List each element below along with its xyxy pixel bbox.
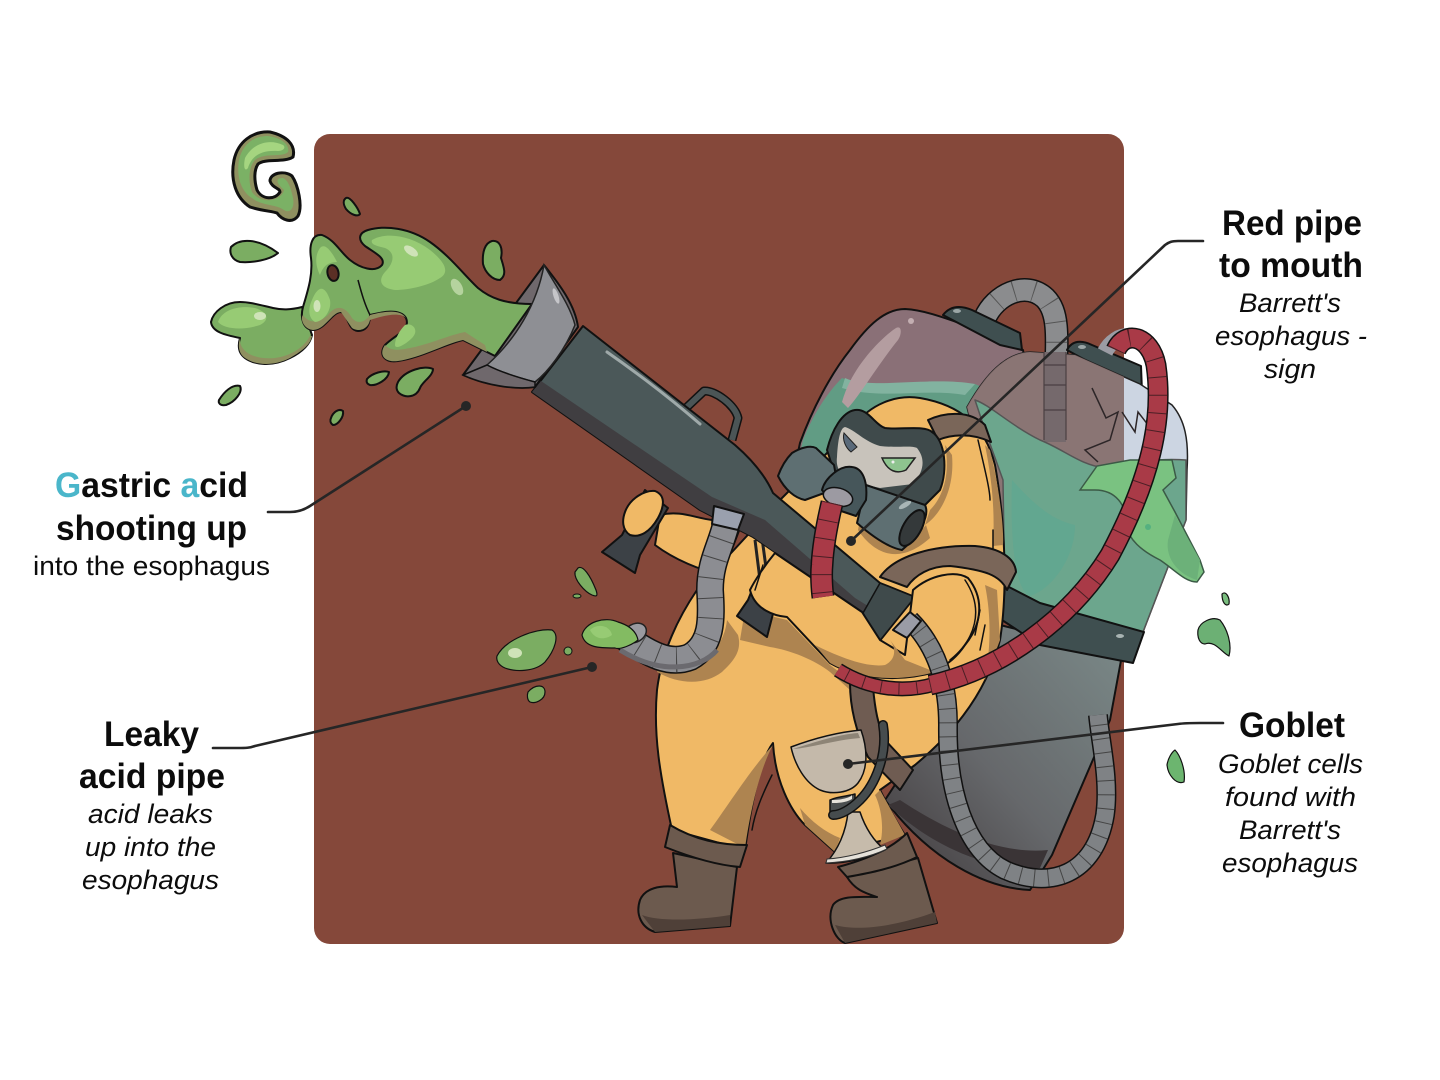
- neck strap: [928, 414, 991, 442]
- holster strap: [833, 725, 884, 815]
- cone outer: [463, 265, 578, 388]
- left filter: [778, 447, 838, 500]
- goblet: [791, 725, 887, 863]
- right filter: [857, 485, 926, 550]
- left boot cuff: [665, 825, 747, 867]
- filter highlights: [898, 499, 912, 511]
- long grey hose: [893, 612, 1106, 878]
- goblet bowl: [791, 730, 866, 793]
- right eye: [882, 458, 915, 472]
- puddle gloss: [508, 648, 522, 658]
- face window: [837, 427, 923, 488]
- shines: [402, 243, 420, 259]
- label: leaky acid pipe: acid leaks: [88, 799, 213, 829]
- upper drip: [575, 567, 597, 596]
- label: gastric acid: [33, 466, 270, 581]
- front grip: [737, 590, 775, 637]
- acid highlight: [1012, 480, 1075, 596]
- left boot: [638, 853, 737, 932]
- belt highlight: [1116, 634, 1124, 638]
- tank caps: [943, 307, 1142, 392]
- hood ring: [827, 410, 944, 505]
- hose seen through glass: [1044, 352, 1066, 442]
- leaky hose: [620, 506, 744, 667]
- lower drip: [527, 686, 545, 703]
- A counter hole: [326, 264, 340, 282]
- right drip leaf: [1167, 750, 1184, 783]
- forearm creases: [755, 565, 980, 660]
- label: red pipe to mouth: [1215, 204, 1367, 384]
- bazooka: [463, 265, 915, 643]
- label: leaky acid pipe: [79, 715, 225, 895]
- left arm: [655, 513, 745, 575]
- panel: brown background: [314, 134, 1124, 944]
- hose mouth: [620, 619, 650, 647]
- shoulder strap: [880, 546, 1016, 590]
- label: goblet: [1218, 706, 1363, 878]
- small tank hose stub: [1105, 336, 1130, 352]
- grip strut: [755, 538, 767, 580]
- gas mask: [778, 410, 944, 550]
- forearm: [750, 553, 979, 678]
- strap by hip: [850, 683, 913, 790]
- barrel sheen: [607, 352, 700, 424]
- suit creases: [752, 440, 993, 830]
- boots: [638, 825, 937, 943]
- callout line: red pipe: [846, 241, 1203, 546]
- back tanks: [790, 290, 1204, 890]
- callout line: leaky pipe: [213, 662, 597, 748]
- acid splash letters: [211, 132, 532, 425]
- callout line: goblet: [843, 723, 1223, 769]
- hose over rear tank: [985, 290, 1057, 420]
- right tank: glass: [967, 352, 1187, 632]
- right drip large: [1198, 619, 1230, 656]
- large puddle: [497, 630, 556, 670]
- label: goblet: Barrett's: [1239, 815, 1341, 845]
- suit body: [656, 397, 1005, 852]
- stream highlight: [372, 236, 445, 290]
- tiny drip: [573, 594, 581, 598]
- label: goblet: esophagus: [1222, 848, 1358, 878]
- acid droplets near nozzle: [219, 198, 504, 425]
- label: red pipe to mouth: Red pipe: [1222, 204, 1362, 243]
- label: goblet: found with: [1225, 782, 1356, 812]
- label: leaky acid pipe: esophagus: [82, 865, 219, 895]
- label: goblet: Goblet: [1239, 706, 1345, 745]
- suit shadows: [657, 445, 1003, 852]
- left hand: [623, 491, 663, 536]
- rear grip: [602, 490, 668, 573]
- left tank: [790, 309, 1040, 560]
- glass crack: [1085, 388, 1152, 462]
- A inner crease: [358, 280, 370, 315]
- label: gastric acid: into the esophagus: [33, 551, 270, 581]
- A and stream shape: [302, 228, 532, 361]
- valve collar: [821, 484, 855, 510]
- long red hose: [838, 338, 1158, 689]
- small round drip: [564, 647, 572, 655]
- pipe spill: [582, 620, 638, 648]
- spill gloss: [590, 626, 612, 638]
- label: red pipe to mouth: sign: [1264, 354, 1316, 384]
- label: gastric acid: Gastric acid: [55, 466, 248, 505]
- right drip small: [1222, 593, 1229, 605]
- overflowing acid: [1080, 460, 1204, 582]
- forearm shadow: [815, 640, 935, 678]
- callout line: gastric acid: [268, 401, 471, 512]
- barrel end flare: [863, 583, 915, 643]
- goblet foot: [826, 812, 885, 863]
- lower tank body: [885, 625, 1122, 890]
- cone inner face: [463, 265, 575, 388]
- cone lower rim: [463, 365, 535, 388]
- acid droplets at leaky pipe: [497, 567, 638, 703]
- cone highlight: [551, 288, 561, 304]
- stream lower shade: [302, 308, 487, 361]
- hose connector: [712, 506, 744, 530]
- label: goblet: Goblet cells: [1218, 749, 1363, 779]
- strap belt on tanks: [1002, 585, 1144, 663]
- letter A with stream: [211, 228, 532, 364]
- front red hose: [822, 503, 832, 597]
- right tank: acid: [975, 400, 1186, 632]
- bazooka handle: [686, 391, 738, 440]
- right tank: glass over panel: [967, 352, 1124, 516]
- right boot sole: [835, 912, 937, 943]
- right boot: [831, 858, 937, 943]
- label: gastric acid: shooting up: [56, 509, 247, 548]
- left eye: [843, 433, 857, 452]
- stream highlight 2: [309, 246, 415, 347]
- left boot sole: [642, 915, 730, 932]
- letter G: [233, 132, 300, 220]
- main hose run: [930, 338, 1158, 685]
- label: leaky acid pipe: acid pipe: [79, 757, 225, 796]
- acid droplets at right side: [1167, 593, 1230, 783]
- left puddle: [211, 302, 312, 364]
- centre valve: [822, 467, 866, 516]
- label: red pipe to mouth: esophagus -: [1215, 321, 1367, 351]
- thin hose end: [838, 670, 935, 689]
- right boot cuff: [838, 833, 917, 877]
- hose neck: [893, 612, 921, 638]
- label: leaky acid pipe: up into the: [85, 832, 216, 862]
- hazmat suit: [655, 397, 1005, 852]
- goblet collar: [830, 794, 855, 815]
- right arm: [750, 553, 980, 678]
- barrel: [532, 326, 915, 643]
- infographic: [34, 130, 1366, 944]
- label: leaky acid pipe: Leaky: [104, 715, 200, 754]
- filter end: [894, 506, 930, 550]
- label: red pipe to mouth: Barrett's: [1239, 288, 1341, 318]
- lower tank dark band: [888, 800, 1048, 868]
- barrel underside shadow: [532, 381, 878, 643]
- label: red pipe to mouth: to mouth: [1219, 246, 1363, 285]
